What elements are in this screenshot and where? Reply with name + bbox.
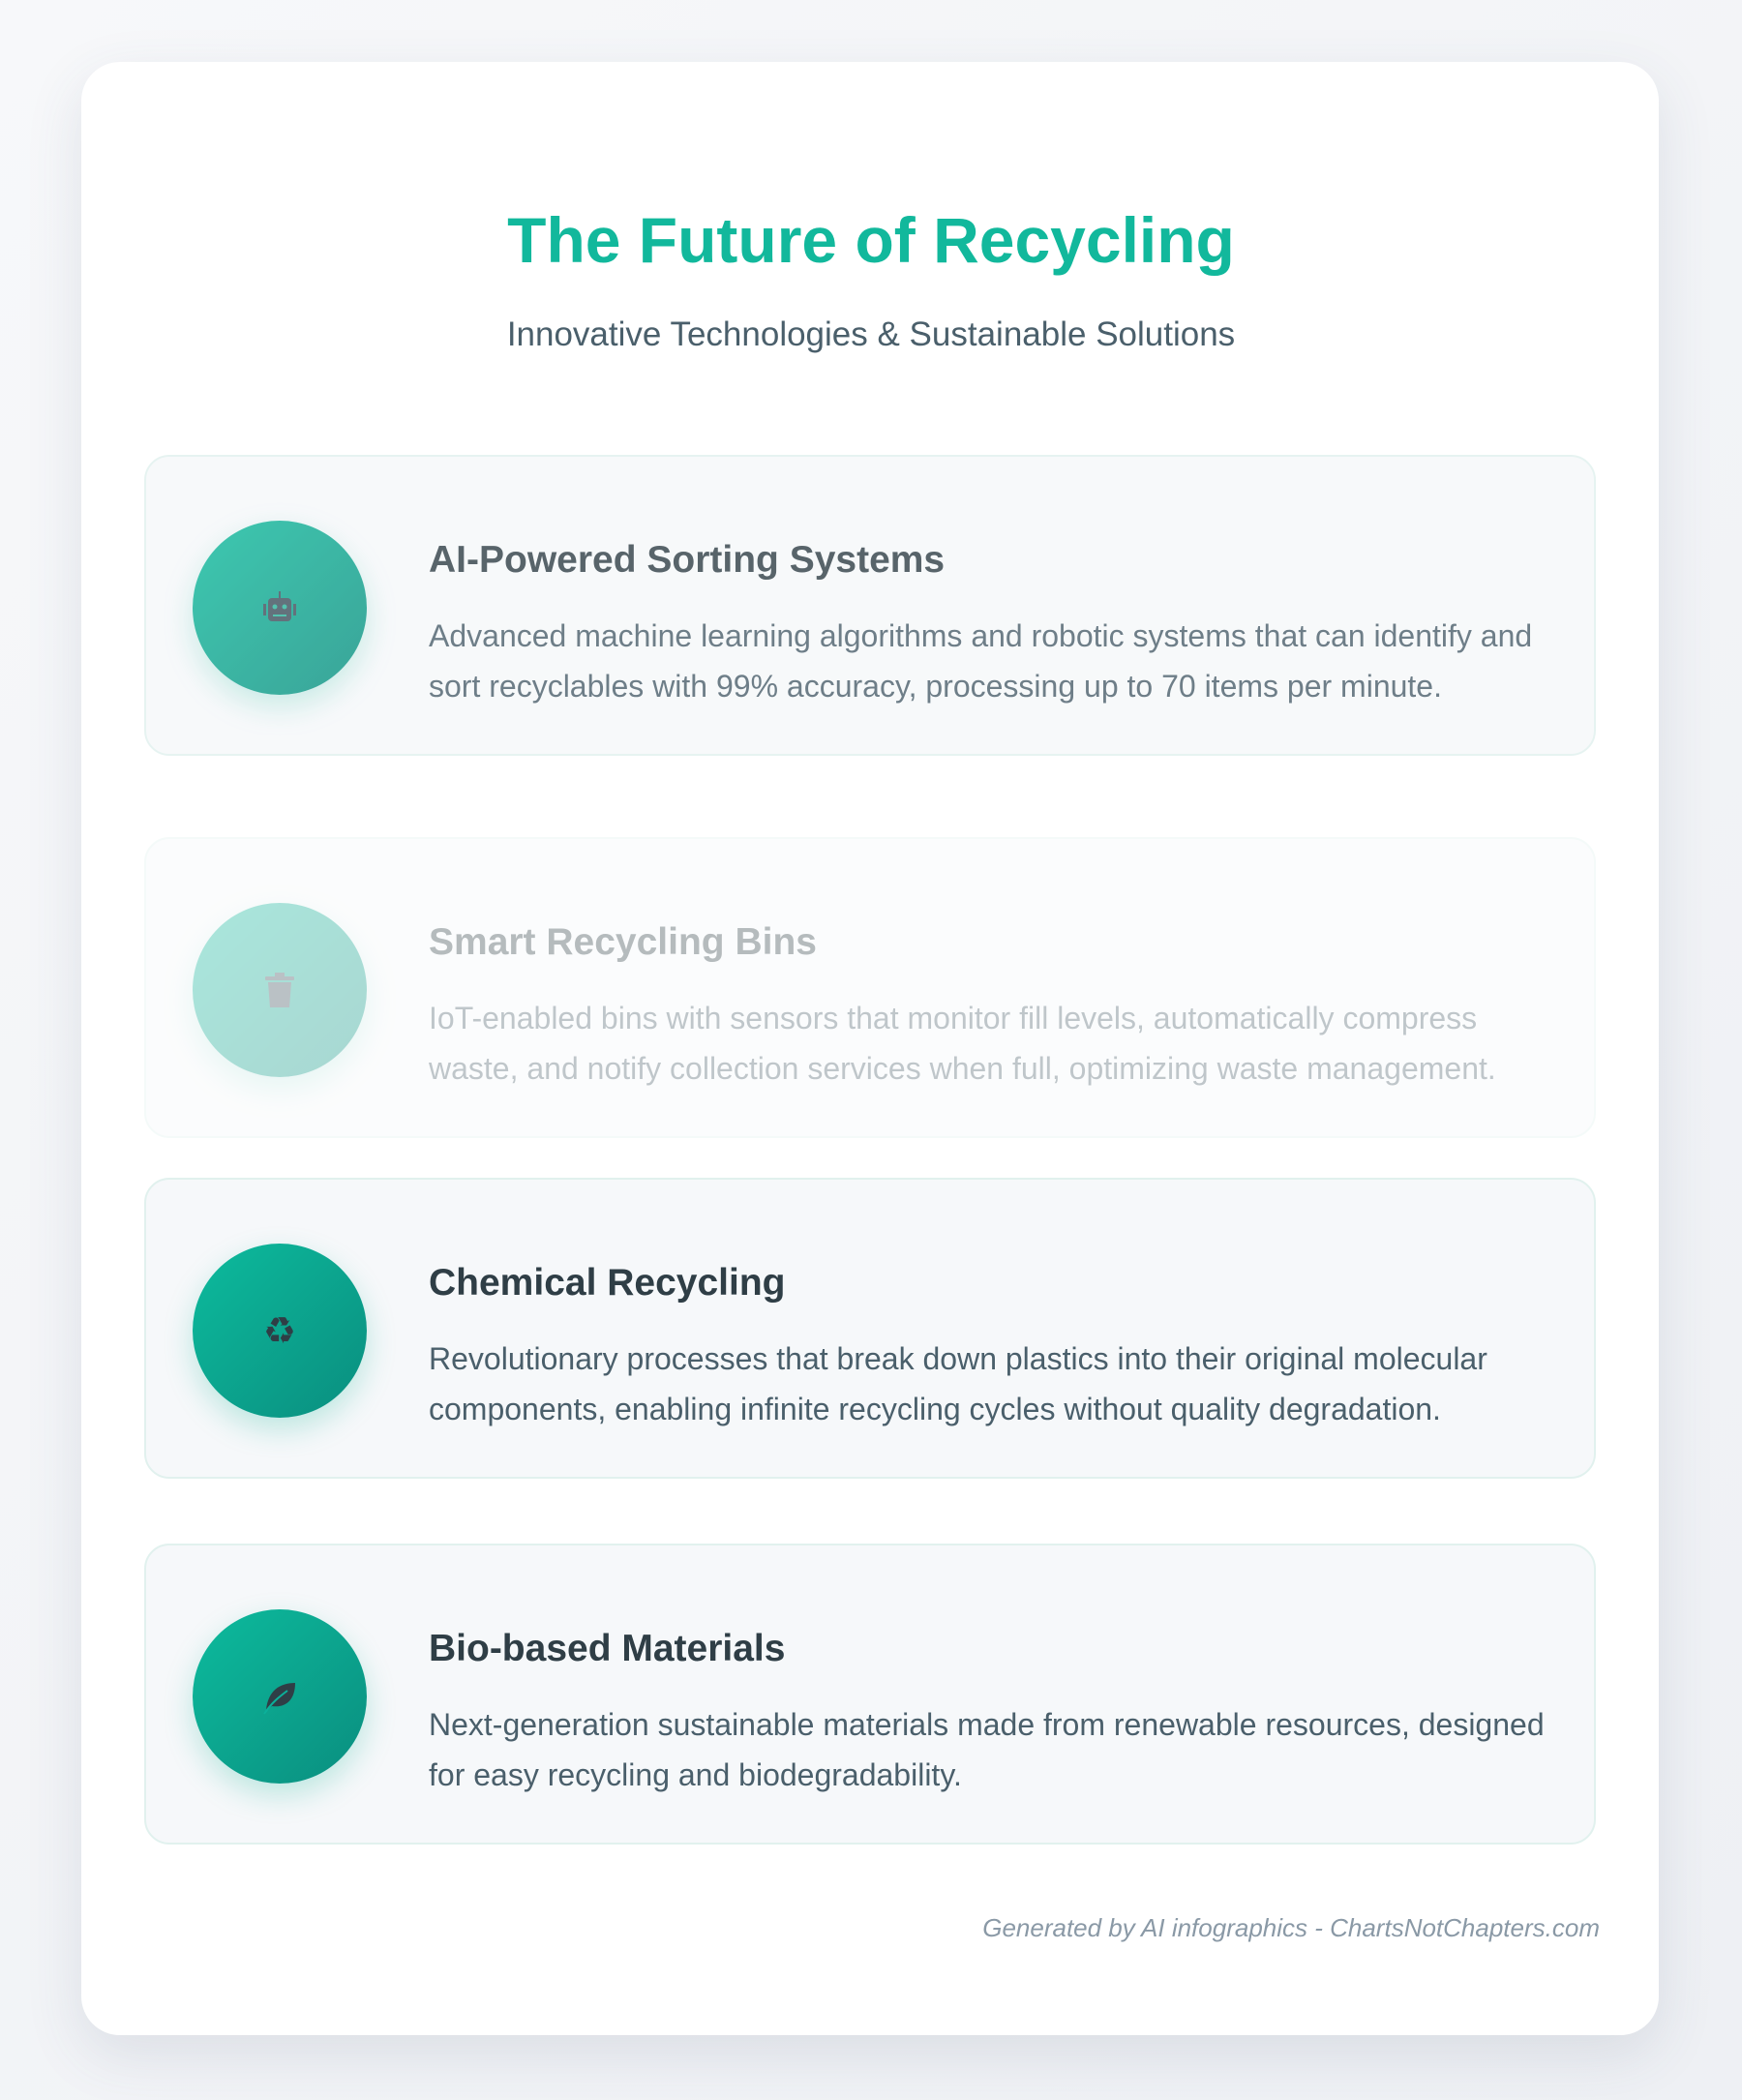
text: Revolutionary processes that break down plastics into their original molecular components, enabling infinite recycling cycles without quality degradation. [429, 1341, 1487, 1426]
icon: trash bin [193, 903, 367, 1077]
heading: Chemical Recycling [429, 1262, 785, 1304]
panel: AI sorting [144, 455, 1596, 756]
panel: bio-based [144, 1544, 1596, 1845]
icon: robot [193, 521, 367, 695]
heading: AI-Powered Sorting Systems [429, 539, 945, 581]
text: Next-generation sustainable materials made from renewable resources, designed for easy recycling and biodegradability. [429, 1707, 1545, 1792]
heading: Bio-based Materials [429, 1628, 785, 1669]
text: Advanced machine learning algorithms and robotic systems that can identify and sort recyclables with 99% accuracy, processing up to 70 items per minute. [429, 618, 1532, 704]
subtitle: Innovative Technologies & Sustainable Solutions [507, 315, 1235, 353]
icon: leaf [193, 1609, 367, 1784]
icon: recycle: ♻ [263, 1309, 296, 1352]
text: IoT-enabled bins with sensors that monitor fill levels, automatically compress waste, and notify collection services when full, optimizing waste management. [429, 1001, 1496, 1086]
title: The Future of Recycling [507, 204, 1235, 276]
panel: smart bins [144, 837, 1596, 1138]
heading: Smart Recycling Bins [429, 921, 817, 963]
footer: Generated by AI infographics - ChartsNotChapters.com [982, 1913, 1600, 1942]
panel: chemical recycling [144, 1178, 1596, 1479]
icon: recycle [193, 1244, 367, 1418]
